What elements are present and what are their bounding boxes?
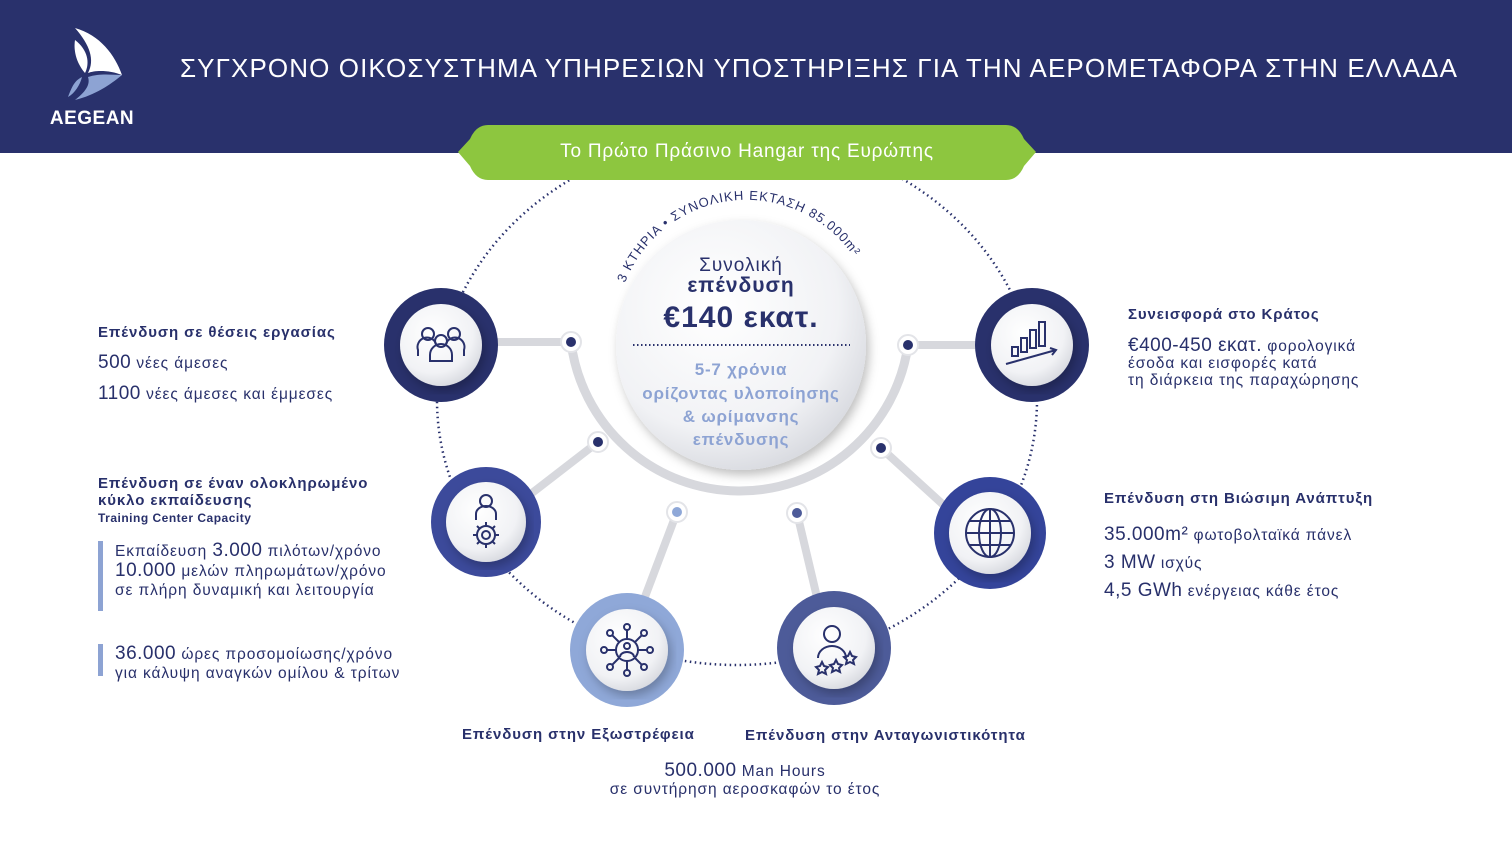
text: training: Training Center Capacity bbox=[98, 511, 251, 525]
text: training: 10.000 μελών πληρωμάτων/χρόνο bbox=[115, 560, 387, 581]
center circle: επένδυση bbox=[687, 274, 795, 297]
text: sustainability: Επένδυση στη Βιώσιμη Ανάπτυξη bbox=[1104, 490, 1373, 507]
center circle: Συνολική bbox=[699, 255, 783, 276]
text: training: Εκπαίδευση 3.000 πιλότων/χρόνο bbox=[115, 540, 381, 561]
text: man hours: σε συντήρηση αεροσκαφών το έτος bbox=[610, 781, 880, 798]
icon: person stars bbox=[777, 591, 891, 705]
green banner: Το Πρώτο Πράσινο Hangar της Ευρώπης bbox=[560, 141, 934, 162]
label: competitiveness: Επένδυση στην Ανταγωνιστικότητα bbox=[745, 727, 1026, 744]
text: training: Επένδυση σε έναν ολοκληρωμένο bbox=[98, 475, 368, 492]
center circle: 3 ΚΤΗΡΙΑ • ΣΥΝΟΛΙΚΗ ΕΚΤΑΣΗ 85.000m² bbox=[618, 190, 860, 282]
text: jobs: 1100 νέες άμεσες και έμμεσες bbox=[98, 383, 333, 404]
text: state: Συνεισφορά στο Κράτος bbox=[1128, 306, 1320, 323]
text: jobs: Επένδυση σε θέσεις εργασίας bbox=[98, 324, 336, 341]
center circle: ορίζοντας υλοποίησης bbox=[642, 384, 840, 403]
text: state bbox=[1128, 306, 1359, 389]
header bar bbox=[0, 0, 1512, 153]
text: state: τη διάρκεια της παραχώρησης bbox=[1128, 372, 1359, 389]
center circle: €140 εκατ. bbox=[663, 301, 819, 334]
text: sustainability: 35.000m² φωτοβολταϊκά πάνελ bbox=[1104, 524, 1352, 545]
center circle: επένδυσης bbox=[693, 430, 789, 449]
icon: globe bbox=[934, 477, 1046, 589]
text: sustainability: 3 MW ισχύς bbox=[1104, 552, 1202, 573]
icon: network bbox=[570, 593, 684, 707]
logo: AEGEAN bbox=[50, 108, 134, 129]
label: outreach: Επένδυση στην Εξωστρέφεια bbox=[462, 726, 695, 743]
text: man hours: 500.000 Man Hours bbox=[664, 760, 826, 781]
text: jobs: 500 νέες άμεσες bbox=[98, 352, 228, 373]
text: training: κύκλο εκπαίδευσης bbox=[98, 492, 252, 509]
icon: gear person bbox=[431, 467, 541, 577]
text: state: έσοδα και εισφορές κατά bbox=[1128, 355, 1317, 372]
text: training: για κάλυψη αναγκών ομίλου & τρίτων bbox=[115, 665, 400, 682]
text: state: €400-450 εκατ. φορολογικά bbox=[1128, 335, 1356, 356]
text: training: 36.000 ώρες προσομοίωσης/χρόνο bbox=[115, 643, 393, 664]
text: training bbox=[98, 475, 400, 682]
text: sustainability: 4,5 GWh ενέργειας κάθε έτος bbox=[1104, 580, 1339, 601]
text: jobs bbox=[98, 324, 336, 404]
center circle bbox=[614, 190, 874, 480]
center circle: 5-7 χρόνια bbox=[695, 360, 787, 379]
green banner bbox=[458, 125, 1036, 180]
icon: chart bbox=[975, 288, 1089, 402]
logo bbox=[50, 28, 134, 129]
title: ΣΥΓΧΡΟΝΟ ΟΙΚΟΣΥΣΤΗΜΑ ΥΠΗΡΕΣΙΩΝ ΥΠΟΣΤΗΡΙΞΗΣ ΓΙΑ ΤΗΝ ΑΕΡΟΜΕΤΑΦΟΡΑ ΣΤΗΝ ΕΛΛΑΔΑ bbox=[180, 53, 1458, 83]
text: sustainability bbox=[1104, 490, 1373, 601]
text: training: σε πλήρη δυναμική και λειτουργία bbox=[115, 582, 375, 599]
text: man hours bbox=[610, 760, 880, 798]
icon: people bbox=[384, 288, 498, 402]
center circle: & ωρίμανσης bbox=[683, 407, 799, 426]
